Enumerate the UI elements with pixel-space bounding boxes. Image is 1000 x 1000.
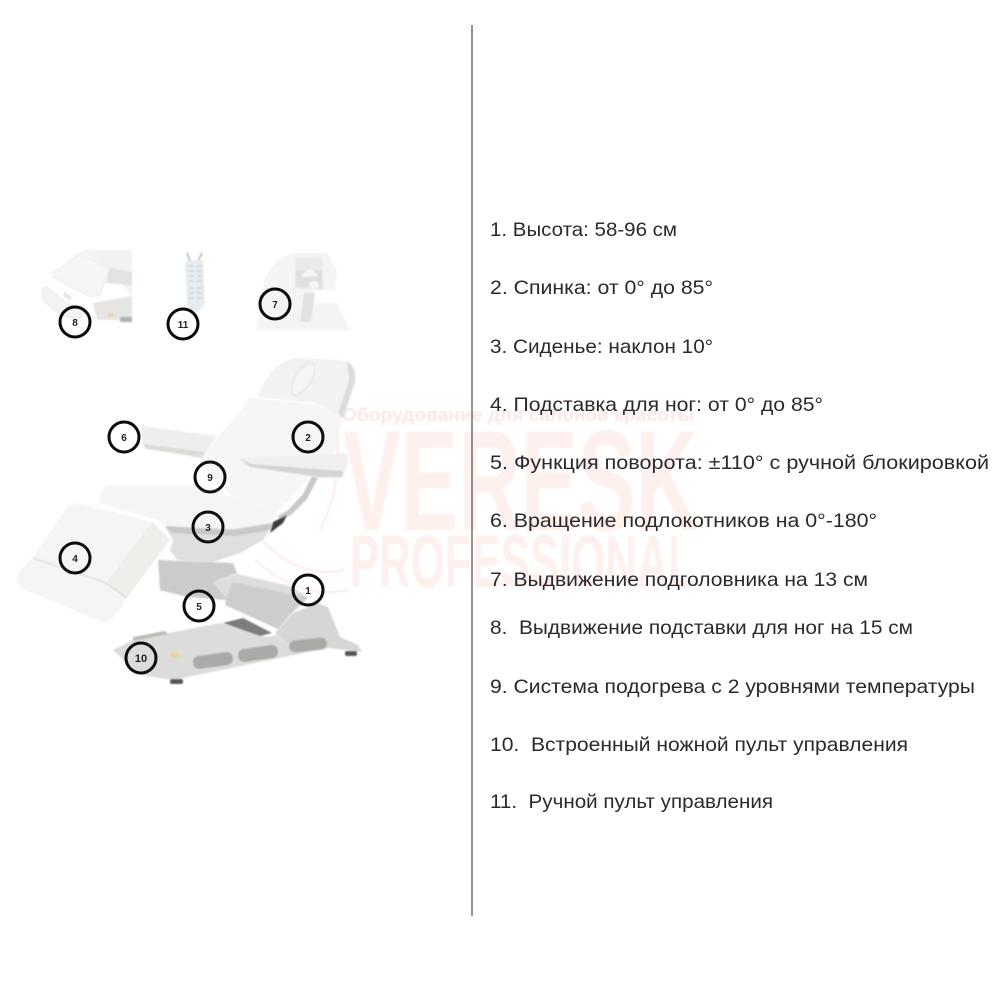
item 5: 5. Функция поворота: ±110° с ручной блокировкой bbox=[490, 452, 989, 474]
item 6: 6. Вращение подлокотников на 0°-180° bbox=[490, 510, 877, 532]
headrest cushion bbox=[258, 358, 355, 418]
left armrest bbox=[142, 426, 217, 458]
item 2: 2. Спинка: от 0° до 85° bbox=[490, 277, 713, 299]
seat underside bbox=[165, 525, 272, 562]
callout 11: 11 bbox=[178, 320, 189, 331]
lift arm bbox=[225, 574, 308, 629]
callout 3: 3 bbox=[205, 523, 211, 534]
backrest cushion bbox=[200, 398, 342, 513]
seat lower trim bbox=[165, 523, 272, 536]
inset: hand remote bbox=[168, 253, 205, 339]
callout 5 bbox=[184, 591, 214, 621]
inset image: headrest bbox=[257, 253, 350, 330]
callout 9 bbox=[195, 462, 225, 492]
callout 10: 10 bbox=[135, 653, 147, 665]
inset: extending leg rest bbox=[42, 250, 132, 337]
callout 2 bbox=[293, 422, 323, 452]
seat cushion bbox=[100, 485, 277, 529]
main chair illustration bbox=[17, 358, 362, 684]
watermark: Veresk Professional bbox=[255, 400, 698, 603]
leg rest side shade bbox=[107, 522, 170, 598]
base rear arm bbox=[275, 603, 362, 652]
callout 1 bbox=[293, 575, 323, 605]
right armrest bbox=[238, 453, 348, 478]
main chair callouts bbox=[60, 422, 323, 673]
callout 8: 8 bbox=[72, 318, 78, 329]
item 9: 9. Система подогрева с 2 уровнями температуры bbox=[490, 676, 975, 698]
dark hinge bbox=[270, 515, 287, 533]
base far edge bbox=[133, 631, 168, 641]
leg rest seam bbox=[33, 558, 127, 598]
callout 6 bbox=[109, 422, 139, 452]
watermark: Veresk Professional: PROFESSIONAL bbox=[350, 520, 695, 603]
chair base plate bbox=[113, 623, 333, 680]
inset image: remote bbox=[185, 253, 205, 312]
left armrest shade bbox=[143, 444, 205, 458]
callout 4 bbox=[60, 543, 90, 573]
item 3: 3. Сиденье: наклон 10° bbox=[490, 336, 713, 358]
lift arm top face bbox=[213, 574, 306, 600]
headrest side shade bbox=[338, 361, 355, 418]
specification list bbox=[490, 219, 989, 813]
callout 5: 5 bbox=[196, 602, 202, 613]
item 4: 4. Подставка для ног: от 0° до 85° bbox=[490, 394, 823, 416]
backrest frame bbox=[278, 476, 318, 520]
item 10: 10. Встроенный ножной пульт управления bbox=[490, 734, 908, 756]
item 1: 1. Высота: 58-96 см bbox=[490, 219, 677, 241]
callout 1: 1 bbox=[305, 586, 311, 597]
item 8: 8. Выдвижение подставки для ног на 15 см bbox=[490, 617, 913, 639]
item 11: 11. Ручной пульт управления bbox=[490, 791, 773, 813]
inset image: leg rest bbox=[42, 250, 132, 322]
swivel column bbox=[158, 560, 237, 600]
base feet bbox=[170, 651, 357, 684]
callout 2: 2 bbox=[305, 433, 311, 444]
vertical divider bbox=[471, 25, 473, 916]
callout 7: 7 bbox=[272, 300, 278, 311]
headrest face opening bbox=[287, 359, 319, 399]
lift mechanism bbox=[223, 618, 272, 636]
armrest underside bbox=[240, 459, 343, 477]
base indicator light bbox=[170, 652, 180, 658]
callout 3 bbox=[193, 512, 223, 542]
callout 10 bbox=[126, 643, 156, 673]
callout 9: 9 bbox=[207, 473, 213, 484]
watermark: Veresk Professional: Оборудование для салонов красоты bbox=[342, 405, 694, 425]
inset: sliding headrest bbox=[257, 253, 350, 330]
watermark: Veresk Professional: VERESK bbox=[343, 402, 698, 561]
leg rest cushion bbox=[17, 503, 170, 622]
callout 6: 6 bbox=[121, 433, 127, 444]
callout 4: 4 bbox=[72, 554, 78, 565]
base pads bbox=[192, 637, 328, 670]
item 7: 7. Выдвижение подголовника на 13 см bbox=[490, 569, 868, 591]
